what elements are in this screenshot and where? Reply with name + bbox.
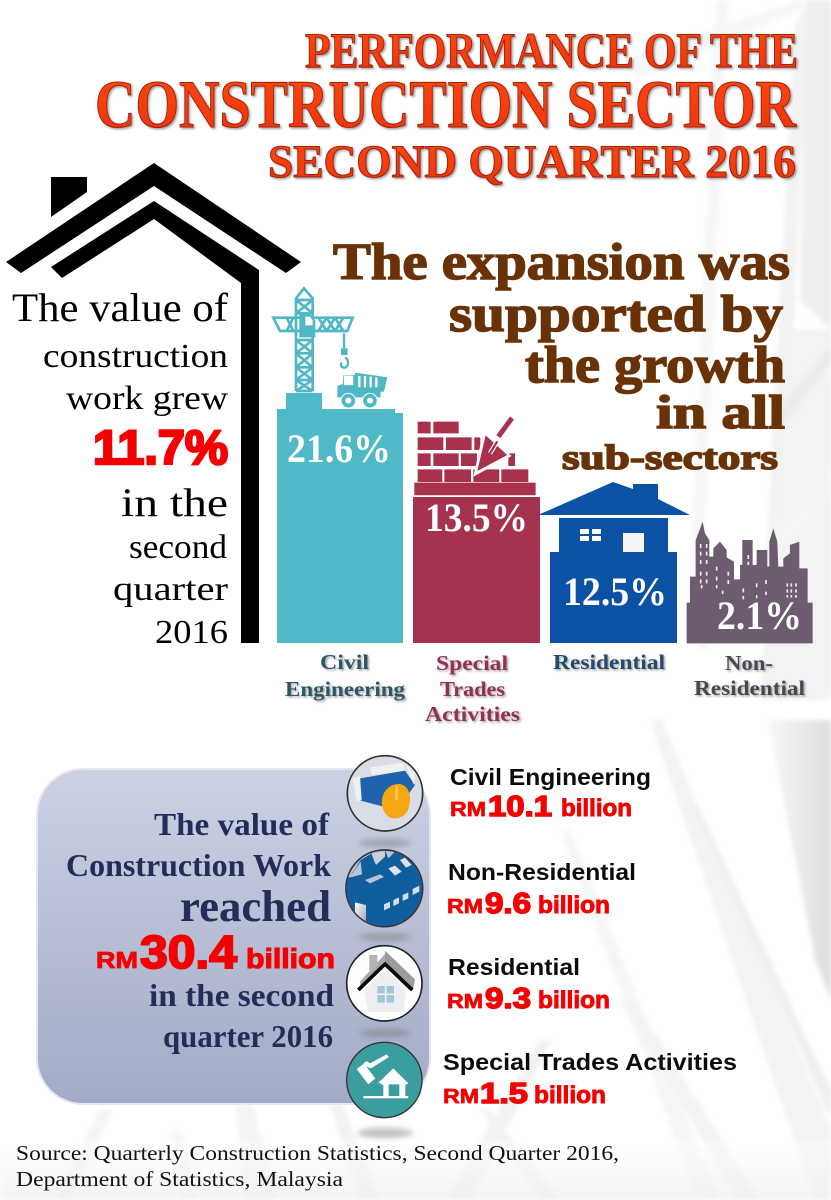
bar: residential <box>538 482 690 643</box>
value: RM30.4 billion <box>96 926 335 978</box>
list item: residential <box>447 954 610 1015</box>
text: value of construction work grew 11.7%: quarter <box>113 571 229 608</box>
value: RM30.4 billion: RM <box>96 947 138 973</box>
icon: windows <box>580 529 644 552</box>
icon: civil engineering blueprint and helmet <box>347 756 423 831</box>
bar: non-residential <box>687 522 813 643</box>
heading: expansion supported by growth <box>333 234 790 477</box>
source note: Source: Quarterly Construction Statistics, Second Quarter 2016, <box>16 1141 619 1165</box>
list item: non-residential: billion <box>538 892 610 919</box>
title: SECOND QUARTER 2016 <box>268 136 796 188</box>
list item: special trades activities: billion <box>534 1082 606 1109</box>
list item: special trades activities: RM <box>443 1086 479 1108</box>
list item: civil engineering: 10.1 <box>488 791 552 823</box>
list item: civil engineering: billion <box>561 795 632 822</box>
list item: non-residential: Non-Residential <box>448 859 636 885</box>
panel: total value <box>37 769 430 1104</box>
list item: residential: 9.3 <box>485 983 531 1015</box>
icon: crane and truck <box>273 288 387 408</box>
list item: non-residential: 9.6 <box>485 888 531 920</box>
text: value of construction work grew 11.7%: in the <box>121 480 228 525</box>
source note: Department of Statistics, Malaysia <box>16 1167 343 1191</box>
category labels <box>285 650 805 726</box>
list item: civil engineering <box>450 764 651 823</box>
list item: special trades activities: Special Trades Activities <box>443 1049 737 1075</box>
text: value of construction work grew 11.7%: The value of <box>12 285 229 330</box>
heading: expansion supported by growth: in all <box>656 386 785 439</box>
icon: special trades roller and house <box>347 1042 422 1118</box>
list item: non-residential: RM <box>447 896 483 918</box>
text: value of construction work grew 11.7%: construction <box>43 338 228 375</box>
icon: non-residential factory <box>345 850 423 928</box>
icon: city skyline <box>687 522 813 643</box>
list item: residential: RM <box>447 991 483 1013</box>
category labels: Civil <box>320 650 369 674</box>
title <box>95 22 798 188</box>
category labels: Special <box>436 651 508 675</box>
heading: expansion supported by growth: the growth <box>525 337 785 394</box>
bar: special trades activities <box>413 418 540 643</box>
text: total value reached: Construction Work <box>66 847 331 883</box>
heading: expansion supported by growth: supported by <box>449 286 783 343</box>
value: 12.5%: 12.5% <box>563 569 667 614</box>
icon: house outline <box>6 163 301 643</box>
list item: residential: Residential <box>448 954 580 980</box>
text: total value reached: quarter 2016 <box>163 1018 333 1054</box>
value: 13.5%: 13.5% <box>425 495 528 540</box>
text: value of construction work grew 11.7%: work grew <box>66 380 228 417</box>
text: total value reached: in the second <box>149 977 334 1013</box>
heading: expansion supported by growth: The expansion was <box>333 234 790 291</box>
category labels: Residential <box>694 676 805 700</box>
icon shadows <box>357 839 413 1138</box>
list item: non-residential <box>447 859 636 920</box>
list item: special trades activities <box>443 1049 737 1110</box>
value: RM30.4 billion: 30.4 <box>140 926 237 978</box>
text: total value reached: reached <box>180 882 331 931</box>
list item: civil engineering: Civil Engineering <box>450 764 651 790</box>
value: RM30.4 billion: billion <box>246 943 335 974</box>
value: 2.1%: 2.1% <box>717 593 802 638</box>
list item: residential: billion <box>538 987 610 1014</box>
icon: residential house <box>347 946 422 1021</box>
text: value of construction work grew 11.7%: second <box>129 529 227 566</box>
text: value of construction work grew 11.7%: 11.7% <box>93 422 228 475</box>
source note <box>16 1141 619 1191</box>
category labels: Activities <box>425 702 520 726</box>
icon: bricks and trowel <box>414 418 536 495</box>
text: total value reached: The value of <box>154 806 329 842</box>
value: 21.6%: 21.6% <box>287 426 391 471</box>
list item: civil engineering: RM <box>450 799 486 821</box>
heading: expansion supported by growth: sub-sectors <box>562 438 778 477</box>
text: value of construction work grew 11.7%: 2016 <box>155 614 228 651</box>
category labels: Non- <box>725 651 773 675</box>
category labels: Residential <box>553 650 665 674</box>
category labels: Engineering <box>285 677 405 701</box>
text: total value reached <box>66 806 334 1054</box>
list item: special trades activities: 1.5 <box>480 1078 528 1110</box>
category labels: Trades <box>440 677 505 701</box>
text: value of construction work grew 11.7% <box>12 285 229 651</box>
bar: civil engineering <box>273 288 403 643</box>
